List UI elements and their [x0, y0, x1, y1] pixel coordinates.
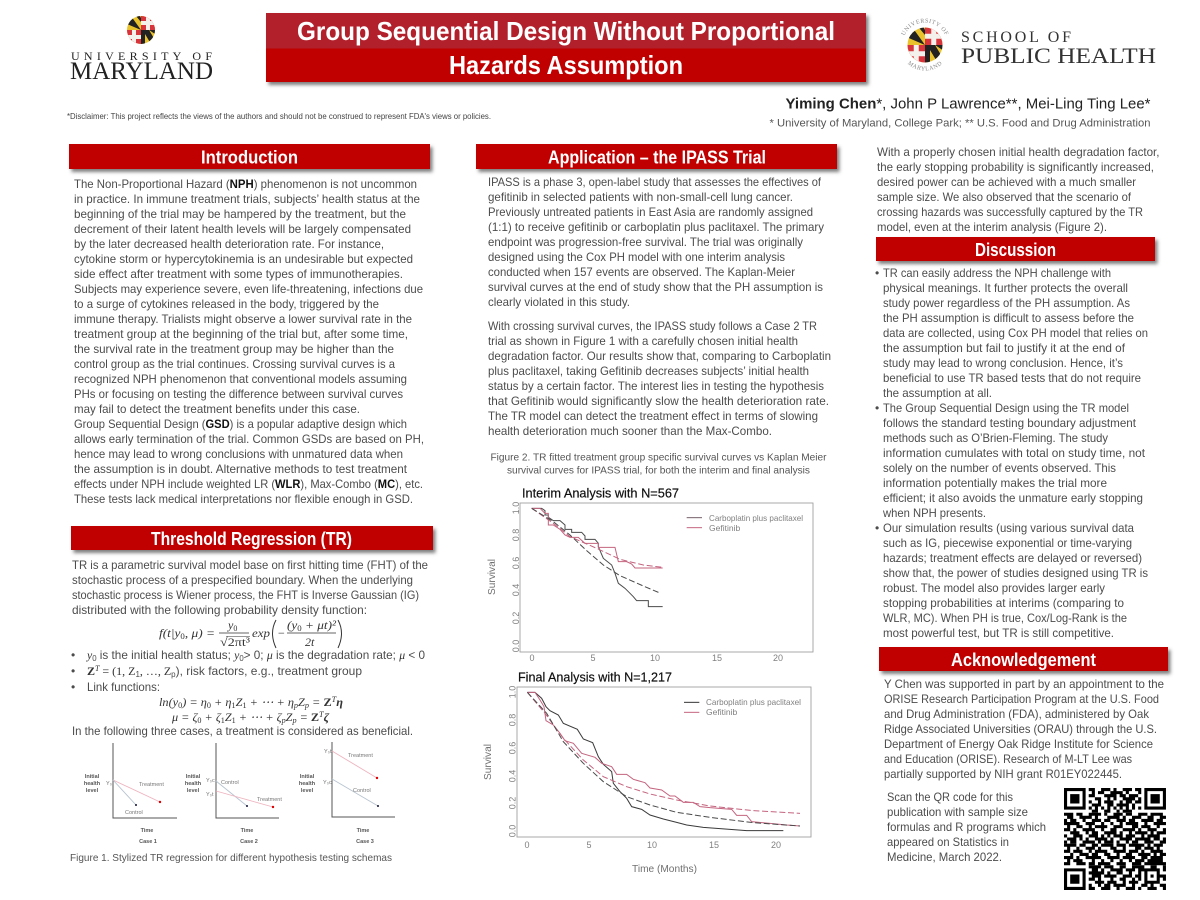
text: application paragraph 2: degradation factor. Our results show that, comparing to Carboplatin [488, 349, 831, 363]
text: application paragraph 1 [488, 175, 824, 309]
list: discussion bullets: information cumulates with total on study time, not [883, 446, 1146, 460]
list: discussion bullets: the assumption but fail to justify it at the end of [883, 341, 1126, 355]
text: application paragraph 2: The TR model can detect the treatment effect in terms of slowing [488, 409, 818, 423]
text: introduction body: control group as the trial continues. Crossing survival curves is a [74, 357, 395, 371]
chart: case 1: health [84, 781, 101, 787]
text: application conclusion: model, even at the interim analysis (Figure 2). [877, 220, 1107, 234]
chart: final analysis survival curves [482, 670, 811, 875]
text: introduction body: effects under NPH include weighted LR (WLR), Max-Combo (MC), etc. [74, 477, 423, 491]
formula: link functions: + ⋯ + ζ [236, 710, 283, 724]
chart: case 1: Treatment [139, 782, 164, 788]
formula: link functions: ln(y [159, 695, 178, 709]
text: application paragraph 2: health deterioration much sooner than the Max-Combo. [488, 424, 772, 438]
logo: University of Maryland: MARYLAND [70, 56, 213, 85]
authors: Yiming Chen*, John P Lawrence**, Mei-Ling Ting Lee* [786, 96, 1151, 112]
text: introduction body: The Non-Proportional Hazard (NPH) phenomenon is not uncommon [74, 177, 417, 191]
axis labels: interim: 0.2 [511, 612, 521, 624]
list: TR model bullets: > 0; [244, 648, 267, 662]
formula: probability density function: 0 [297, 624, 302, 633]
title banner: Group Sequential Design Without Proportional [297, 16, 835, 46]
text: application conclusion: sample size. We also observed that the scenario of [877, 190, 1132, 204]
text: QR code note: appeared on Statistics in [887, 835, 1009, 849]
axis labels: interim: 0.0 [511, 640, 521, 652]
chart: case 2: Y₀c [206, 778, 215, 784]
chart: case 2: Y₀t [206, 792, 214, 798]
heading: threshold regression: Threshold Regression (TR) [151, 528, 352, 549]
text: introduction body: PHs or focusing on testing the difference between survival curves [74, 387, 403, 401]
text: QR code note: Scan the QR code for this [887, 790, 1013, 804]
list: TR model bullets: • [71, 648, 75, 662]
list: discussion bullets: efficient; it also avoids the unmature early stopping [883, 491, 1143, 505]
text: acknowledgement body: and Education (ORISE). Research of M-LT Lee was [884, 752, 1132, 766]
list: discussion bullets: • [875, 401, 879, 415]
axis labels: final: 0.6 [508, 742, 518, 754]
axis labels: interim: Survival [486, 559, 498, 595]
axis labels: interim: 10 [650, 653, 660, 663]
caption: figure 1: Figure 1. Stylized TR regression for different hypothesis testing schemas [70, 852, 392, 864]
logo: School of Public Health: UNIVERSITY OF [901, 18, 949, 35]
logo: School of Public Health: PUBLIC HEALTH [961, 43, 1156, 68]
chart: case 1: Initial [85, 774, 100, 780]
text: TR description [72, 558, 428, 617]
panel: introduction [69, 144, 430, 506]
list: TR model bullets: • [71, 680, 75, 694]
axis labels: interim [486, 502, 783, 663]
heading: application [476, 144, 837, 169]
list: discussion bullets: stopping probabilities at interims (comparing to [883, 596, 1124, 610]
chart: case 2: health [185, 781, 202, 787]
text: introduction body: to a surge of cytokines released in the body, triggered by the [74, 297, 379, 311]
formula: link functions: p [293, 701, 298, 710]
formula: link functions: + ⋯ + η [247, 695, 294, 709]
caption: figure 2: survival curves for IPASS trial, for both the interim and final analysis [507, 464, 810, 476]
formula: probability density function: + μt)² [302, 618, 336, 632]
heading: introduction: Introduction [201, 146, 298, 168]
formula: probability density function: − [278, 626, 285, 640]
disclaimer: *Disclaimer: This project reflects the views of the authors and should not be construed to represent FDA's views or policies. [67, 111, 491, 121]
axis labels: final: 1.0 [508, 686, 518, 698]
list: discussion bullets: physical meanings. It further protects the overall [883, 281, 1128, 295]
text: application conclusion: the early stopping probability is significantly increased, [877, 160, 1154, 174]
axis labels: final: 0.8 [508, 714, 518, 726]
text: introduction body: decrement of their latent health levels will be largely compensated [74, 222, 411, 236]
heading: discussion: Discussion [975, 239, 1056, 260]
list: discussion bullets: information potentially makes the trial more [883, 476, 1107, 490]
axis labels: interim: 0.4 [511, 584, 521, 596]
legend: interim: Gefitinib [709, 523, 740, 533]
formula: link functions: p [304, 701, 309, 710]
axis labels: final: 0 [524, 840, 530, 850]
axis labels: interim: 5 [590, 653, 596, 663]
formula: link functions [159, 695, 343, 725]
chart title: final: Final Analysis with N=1,217 [518, 670, 672, 684]
list: discussion bullets: such as IG, piecewise exponential or time-varying [883, 536, 1132, 550]
text: introduction body: treatment group at the beginning of the trial but, after some time, [74, 327, 408, 341]
chart title: interim: Interim Analysis with N=567 [522, 486, 679, 500]
chart: case 3: Initial [300, 774, 315, 780]
chart: case 2: Control [221, 780, 239, 786]
formula: probability density function: 2t [305, 635, 315, 649]
list: TR model bullets [71, 648, 425, 694]
axis labels: interim: 0.8 [511, 529, 521, 541]
formula: link functions: = [309, 695, 323, 709]
formula: link functions: Z [323, 695, 332, 709]
formula: link functions: Z [225, 710, 232, 724]
formula: link functions: 0 [178, 701, 182, 710]
list: TR model bullets: is the initial health status; [97, 648, 234, 662]
text: acknowledgement body: Ridge Associated Universities (ORAU) through the U.S. [884, 722, 1157, 736]
list: discussion bullets: study may lead to wrong conclusion. Hence, it’s [883, 356, 1123, 370]
legend: final [706, 697, 801, 717]
text: introduction body: the assumption is in doubt. Alternative methods to test treatment [74, 462, 408, 476]
axis labels: final: 0.0 [508, 825, 518, 837]
formula: link functions: Z [236, 695, 243, 709]
text: TR description: stochastic process is Wiener process, the FHT is Inverse Gaussian (IG) [72, 588, 419, 602]
text: application conclusion: crossing hazards was successfully captured by the TR [877, 205, 1143, 219]
text: application paragraph 2: With crossing survival curves, the IPASS study follows a Case 2 TR [488, 319, 817, 333]
text: TR description: TR is a parametric survival model base on first hitting time (FHT) of the [72, 558, 428, 572]
formula: link functions: Z [286, 710, 293, 724]
formula: link functions: = [297, 710, 311, 724]
heading: introduction [69, 144, 430, 169]
text: application paragraph 2: trial as shown in Figure 1 with a carefully chosen initial health [488, 334, 798, 348]
text: application paragraph 1: Previously untreated patients in East Asia are randomly assigned [488, 205, 813, 219]
text: introduction body: may fail to detect the treatment benefits under this case. [74, 402, 360, 416]
heading: discussion [876, 237, 1155, 261]
list: discussion bullets: • [875, 521, 879, 535]
list: discussion bullets: beneficial to use TR based tests that do not require [883, 371, 1141, 385]
text: application paragraph 1: clearly violated in this study. [488, 295, 630, 309]
text: introduction body: beginning of the trial may be hampered by the treatment, but the [74, 207, 406, 221]
list: discussion bullets: the assumption at all. [883, 386, 992, 400]
text: QR code note: Medicine, March 2022. [887, 850, 1002, 864]
chart: case 1: level [86, 788, 99, 794]
list: TR model bullets: y [86, 648, 93, 662]
text: application paragraph 2 [488, 319, 831, 438]
chart: case 2: Case 2 [240, 839, 258, 845]
icon: QR code [1064, 790, 1166, 888]
formula: link functions: 0 [207, 701, 211, 710]
formula: link functions: Z [311, 710, 319, 724]
chart: case 1: Control [125, 810, 143, 816]
formula: link functions: T [332, 695, 337, 704]
legend: interim [709, 513, 803, 533]
caption: figure 2: Figure 2. TR fitted treatment group specific survival curves vs Kaplan Meier [490, 452, 827, 464]
panel: threshold regression [70, 526, 433, 864]
chart: case 2: Treatment [257, 797, 282, 803]
chart: case 1: Y₀ [106, 781, 112, 787]
axis labels: final: 0.4 [508, 770, 518, 782]
text: application paragraph 2: that Gefitinib would significantly slow the health deterioration rate. [488, 394, 829, 408]
text: introduction body: immune therapy. Trialists might observe a lower survival rate in the [74, 312, 412, 326]
text: acknowledgement body: Department of Energy Oak Ridge Institute for Science [884, 737, 1153, 751]
list: discussion bullets: solely on the number of events observed. This [883, 461, 1116, 475]
formula: probability density function: y [228, 618, 233, 632]
chart: case 2: Initial [186, 774, 201, 780]
text: acknowledgement body: partially supported by NIH grant R01EY022445. [884, 767, 1122, 781]
figure 1: stylized TR regression cases [84, 742, 395, 845]
list: TR model bullets: 1 [135, 670, 140, 679]
list: TR model bullets: = (1, Z [99, 664, 135, 678]
chart: case 3: Control [353, 788, 371, 794]
formula: probability density function: √2πt³ [220, 635, 250, 649]
panel: application [476, 144, 837, 875]
list: TR model bullets: Z [87, 664, 95, 678]
list: TR model bullets: 0 [92, 654, 97, 663]
text: introduction body: Subjects may experience severe, even life-threatening, infections due [74, 282, 423, 296]
list: TR model bullets: 0 [239, 654, 244, 663]
formula: link functions: + η [211, 695, 232, 709]
formula: probability density function: exp [252, 626, 270, 640]
text: QR code note: publication with sample size [887, 805, 1028, 819]
axis labels: final: Time (Months) [632, 863, 697, 875]
formula: link functions: 1 [243, 701, 247, 710]
chart: case 3: health [299, 781, 316, 787]
axis labels: interim: 0.6 [511, 557, 521, 569]
text: TR description: distributed with the following probability density function: [72, 603, 367, 617]
text: introduction body: by the later decreased health deterioration rate. For instance, [74, 237, 384, 251]
logo: University of Maryland: UNIVERSITY OF [71, 49, 212, 63]
logo: University of Maryland [70, 16, 213, 85]
list: discussion bullets: most powerful test, but TR is still competitive. [883, 626, 1114, 640]
panel: acknowledgement [879, 647, 1168, 781]
text: application paragraph 2: plus paclitaxel, taking Gefitinib decreases subjects’ initial health [488, 364, 809, 378]
text: application paragraph 1: conducted when 157 events are observed. The Kaplan-Meier [488, 265, 795, 279]
list: discussion bullets: when NPH presents. [882, 506, 986, 520]
formula: probability density function: (y [287, 618, 296, 632]
logo: School of Public Health: SCHOOL OF [961, 29, 1071, 46]
axis labels: final: Survival [482, 744, 494, 780]
formula: link functions: 1 [232, 716, 236, 725]
chart: case 2: level [187, 788, 200, 794]
text: three cases intro: In the following three cases, a treatment is considered as beneficial. [72, 724, 413, 738]
formula: link functions: T [319, 710, 324, 719]
text: introduction body: recognized NPH phenomenon that conventional models assuming [74, 372, 407, 386]
legend: final: Gefitinib [706, 707, 737, 717]
text: introduction body: hence may lead to wrong conclusions with unmatured data when [74, 447, 403, 461]
text: application conclusion: desired power can be achieved with a much smaller [877, 175, 1136, 189]
title banner: Hazards Assumption [449, 50, 683, 80]
formula: probability density function: 0 [180, 632, 185, 641]
formula: link functions: p [281, 716, 286, 725]
heading: acknowledgement: Acknowledgement [951, 649, 1096, 670]
list: discussion bullets: TR can easily address the NPH challenge with [883, 266, 1111, 280]
text: application paragraph 1: designed using the Cox PH model with one interim analysis [488, 250, 785, 264]
text: introduction body: Group Sequential Design (GSD) is a popular adaptive design which [74, 417, 407, 431]
chart: case 1: Time [141, 828, 153, 834]
panel: discussion [875, 237, 1155, 640]
axis labels: final: 20 [771, 840, 781, 850]
text: introduction body: in practice. In immune treatment trials, subjects’ health status at the [74, 192, 420, 206]
list: discussion bullets: study power regardless of the PH assumption. As [883, 296, 1130, 310]
text: introduction body [74, 177, 424, 506]
list: discussion bullets: show that, the power of studies designed using TR is [883, 566, 1148, 580]
text: introduction body: side effect after treatment with some types of immunotherapies. [74, 267, 403, 281]
list: TR model bullets: μ is the degradation rate; μ < 0 [267, 648, 425, 662]
text: QR code note: formulas and R programs which [887, 820, 1046, 834]
formula: link functions: 0 [197, 716, 201, 725]
list: TR model bullets: Link functions: [87, 680, 160, 694]
logo: School of Public Health [901, 18, 1156, 71]
text: application paragraph 2: status by a certain factor. The interest lies in testing the hypothesis [488, 379, 824, 393]
text: introduction body: These tests lack medical interpretations nor flexible enough in GSD. [74, 492, 413, 506]
chart: case 3: Y₀c [323, 780, 332, 786]
legend: interim: Carboplatin plus paclitaxel [709, 513, 803, 523]
list: discussion bullets: the PH assumption is difficult to assess before the [883, 311, 1134, 325]
formula: probability density function: f(t|y [159, 626, 178, 640]
chart: case 3: Treatment [348, 753, 373, 759]
axis labels: interim: 1.0 [511, 502, 521, 514]
axis labels: final [482, 686, 781, 875]
list: TR model bullets: , …, Z [140, 664, 171, 678]
chart: case 3: Time [357, 828, 369, 834]
formula: probability density function: , μ) = [185, 626, 215, 640]
text: application paragraph 1: IPASS is a phase 3, open-label study that assesses the effectives of [488, 175, 822, 189]
list: discussion bullets: hazards; treatment effects are delayed or reversed) [883, 551, 1142, 565]
list: discussion bullets: data are collected, using Cox PH model that relies on [883, 326, 1148, 340]
chart: case 2 [185, 743, 282, 845]
axis labels: interim: 20 [773, 653, 783, 663]
text: TR description: stochastic process of a prespecified boundary. When the underlying [72, 573, 413, 587]
affiliations: * University of Maryland, College Park; ** U.S. Food and Drug Administration [770, 118, 1150, 130]
chart: case 1: Case 1 [139, 839, 157, 845]
text: acknowledgement body: ORISE Research Participation Program at the U.S. Food [884, 692, 1159, 706]
formula: link functions: ) = η [181, 695, 207, 709]
chart: case 3: level [301, 788, 314, 794]
text: application paragraph 1: survival curves at the end of study show that the PH assumption is [488, 280, 823, 294]
chart: case 3 [299, 742, 395, 845]
text: application paragraph 1: gefitinib in selected patients with non-small-cell lung cancer. [488, 190, 793, 204]
text: QR code note [887, 790, 1046, 864]
formula: link functions: 1 [221, 716, 225, 725]
title banner [266, 13, 866, 82]
caption: figure 2 [490, 452, 827, 476]
axis labels: interim: 15 [712, 653, 722, 663]
list: discussion bullets: The Group Sequential Design using the TR model [883, 401, 1129, 415]
list: discussion bullets: WLR, MC). When PH is true, Cox/Log-Rank is the [883, 611, 1127, 625]
text: acknowledgement body: Y Chen was supported in part by an appointment to the [884, 677, 1164, 691]
formula: link functions: 1 [232, 701, 236, 710]
text: introduction body: allows early termination of the trial. Common GSDs are based on PH, [74, 432, 424, 446]
heading: acknowledgement [879, 647, 1168, 671]
list: TR model bullets: T [95, 664, 100, 673]
chart: interim analysis survival curves [486, 486, 813, 663]
text: application paragraph 1: (1:1) to receive gefitinib or carboplatin plus paclitaxel. The primary [488, 220, 824, 234]
formula: probability density function: 0 [233, 624, 237, 633]
axis labels: final: 15 [709, 840, 719, 850]
formula: link functions: Z [298, 695, 305, 709]
chart: case 2: Time [241, 828, 253, 834]
list: TR model bullets: y [233, 648, 240, 662]
text: acknowledgement body [884, 677, 1164, 781]
formula: link functions: ζ [324, 710, 330, 724]
text: acknowledgement body: and Drug Administration (FDA), administered by Oak [884, 707, 1150, 721]
legend: final: Carboplatin plus paclitaxel [706, 697, 801, 707]
formula: link functions: + ζ [201, 710, 222, 724]
list: TR model bullets: ), risk factors, e.g., treatment group [176, 664, 362, 678]
axis labels: final: 0.2 [508, 797, 518, 809]
chart: case 1 [84, 743, 177, 845]
list: discussion bullets: robust. The model also provides larger early [883, 581, 1105, 595]
text: introduction body: the survival rate in the treatment group may be higher than the [74, 342, 394, 356]
text: introduction body: cytokine storm or hypercytokinemia is an undesirable but expected [74, 252, 413, 266]
axis labels: final: 5 [586, 840, 592, 850]
text: application conclusion [877, 145, 1160, 234]
heading: application: Application – the IPASS Trial [548, 146, 766, 168]
chart: case 3: Y₀t [324, 749, 332, 755]
formula: link functions: μ = ζ [172, 710, 197, 724]
chart: case 3: Case 3 [356, 839, 374, 845]
list: discussion bullets [875, 266, 1148, 640]
formula: link functions: p [291, 716, 297, 725]
heading: threshold regression [71, 526, 433, 550]
list: discussion bullets: • [875, 266, 879, 280]
formula: probability density function [159, 618, 342, 649]
list: discussion bullets: Our simulation results (using various survival data [883, 521, 1134, 535]
axis labels: interim: 0 [529, 653, 535, 663]
list: discussion bullets: follows the standard testing boundary adjustment [883, 416, 1137, 430]
logo: School of Public Health: MARYLAND [908, 60, 942, 71]
list: TR model bullets: • [71, 664, 75, 678]
formula: link functions: η [336, 695, 343, 709]
axis labels: final: 10 [647, 840, 657, 850]
text: application conclusion: With a properly chosen initial health degradation factor, [877, 145, 1160, 159]
text: application paragraph 1: endpoint was progression-free survival. The trial was originally [488, 235, 803, 249]
list: discussion bullets: methods such as O’Brien-Fleming. The study [883, 431, 1108, 445]
list: TR model bullets: p [171, 670, 176, 679]
